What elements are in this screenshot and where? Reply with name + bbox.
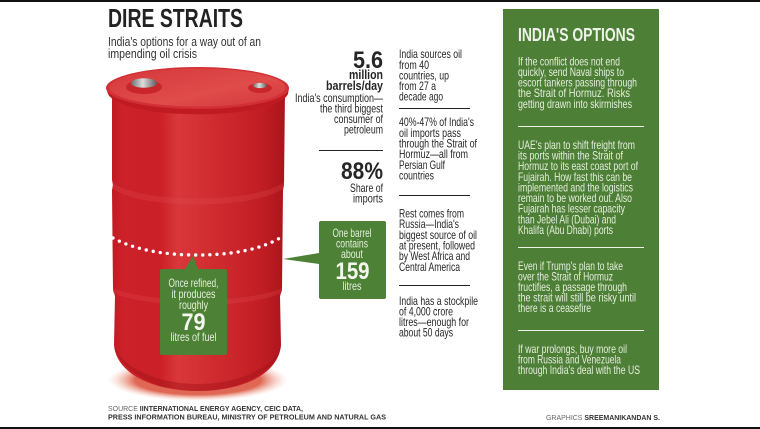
text block: stockpile: about 50 days [399, 326, 453, 340]
stat: 5.6 million barrels per day: million [349, 67, 383, 82]
callout: 79 litres of fuel: it produces [172, 288, 216, 301]
graphics credit: GRAPHICS SREEMANIKANDAN S. [546, 413, 660, 422]
option: UAE freight shift: implemented and the logistics [518, 182, 633, 194]
option: Trump's plan [518, 260, 636, 315]
text block: stockpile: litres—enough for [399, 316, 469, 329]
stat: 5.6 million barrels per day: consumer of [334, 113, 384, 126]
stat: 5.6 million barrels per day: India's consumption— [295, 92, 383, 105]
option: buy more oil [518, 343, 640, 377]
text block: oil sources: from 27 a [399, 80, 436, 93]
option: Trump's plan: Even if Trump's plan to take [518, 260, 623, 273]
option: naval escort: If the conflict does not end [518, 56, 620, 68]
stat: 88 percent share of imports: Share of [350, 182, 384, 195]
text block: stockpile: India has a stockpile [399, 295, 478, 308]
dotted fill line [113, 236, 283, 255]
text block: stockpile: of 4,000 crore [399, 306, 453, 318]
option: UAE freight shift: Fujairah. How fast this can be [518, 171, 632, 184]
text block: other sources [399, 208, 477, 274]
callout: 159 litres per barrel: One barrel [332, 227, 372, 240]
callout: 159 litres per barrel: litres [342, 280, 362, 293]
source credit [108, 404, 386, 422]
callout: 79 litres of fuel: roughly [179, 299, 208, 312]
text block: other sources: biggest source of oil [399, 229, 477, 242]
text block: Strait of Hormuz share: 40%-47% of India's [399, 116, 474, 129]
panel: India's options [503, 9, 659, 390]
option: buy more oil: from Russia and Venezuela [518, 354, 621, 366]
subtitle: India's options for a way out of an [108, 34, 261, 49]
callout: 159 litres per barrel: about [341, 248, 364, 261]
option: Trump's plan: the strait will still be risky until [518, 292, 636, 304]
illustration: red oil barrel [106, 67, 289, 401]
option: naval escort: quickly, send Naval ships to [518, 66, 624, 79]
callout: 79 litres of fuel: litres of fuel [170, 331, 216, 344]
text block: Strait of Hormuz share [399, 116, 478, 182]
option: Trump's plan: there is a ceasefire [518, 302, 591, 315]
callout: 159 litres per barrel: 159 [336, 258, 370, 285]
source credit: PRESS INFORMATION BUREAU, MINISTRY OF PETROLEUM AND NATURAL GAS [108, 412, 386, 422]
subtitle [108, 34, 261, 61]
stat: 88 percent share of imports: imports [353, 192, 383, 206]
text block: Strait of Hormuz share: Hormuz—all from [399, 148, 468, 161]
text block: other sources: Central America [399, 261, 460, 274]
option: buy more oil: through India's deal with the US [518, 364, 640, 377]
option: UAE freight shift: Fujairah has lesser capacity [518, 202, 625, 216]
source credit: SOURCE IINTERNATIONAL ENERGY AGENCY, CEIC DATA, [108, 404, 303, 413]
stat: 88 percent share of imports: 88% [341, 158, 383, 185]
callout: 159 litres per barrel [283, 221, 386, 299]
text block: oil sources: countries, up [399, 70, 449, 82]
option: naval escort: escort tankers passing through [518, 76, 637, 90]
stat: 5.6 million barrels per day: the third biggest [320, 102, 384, 116]
option: naval escort: the Strait of Hormuz. Risks [518, 87, 630, 100]
option: UAE freight shift: UAE's plan to shift freight from [518, 139, 635, 152]
text block: Strait of Hormuz share: countries [399, 170, 434, 182]
text block: oil sources: from 40 [399, 59, 429, 72]
text block: oil sources [399, 48, 462, 104]
stat: 5.6 million barrels per day: 5.6 [353, 47, 383, 74]
title: DIRE STRAITS [108, 5, 243, 33]
option: UAE freight shift [518, 139, 639, 237]
option: naval escort: getting drawn into skirmishes [518, 98, 632, 111]
option: Trump's plan: over the Strait of Hormuz [518, 270, 613, 284]
panel heading: INDIA'S OPTIONS [518, 24, 635, 45]
text block: other sources: at present, followed [399, 240, 475, 252]
text block: stockpile [399, 295, 478, 340]
text block: Strait of Hormuz share: oil imports pass [399, 127, 461, 140]
option: UAE freight shift: Hormuz to its east coast port of [518, 160, 639, 173]
text block: oil sources: India sources oil [399, 48, 462, 61]
option: naval escort [518, 56, 637, 111]
stat: 5.6 million barrels per day: petroleum [344, 124, 383, 136]
text block: other sources: Rest comes from [399, 208, 464, 220]
callout: 159 litres per barrel: contains [336, 238, 368, 250]
stat: 5.6 million barrels per day [295, 47, 384, 136]
callout: 79 litres of fuel: 79 [182, 309, 206, 336]
text block: oil sources: decade ago [399, 90, 443, 104]
option: UAE freight shift: Khalifa (Abu Dhabi) ports [518, 224, 613, 237]
text block: other sources: Russia—India's [399, 218, 459, 231]
text block: Strait of Hormuz share: Persian Gulf [399, 159, 446, 172]
option: UAE freight shift: than Jebel Ali (Dubai) and [518, 214, 616, 226]
stat: 5.6 million barrels per day: barrels/day [326, 78, 384, 93]
subtitle: impending oil crisis [108, 46, 197, 61]
callout: 79 litres of fuel [160, 256, 227, 355]
text block: other sources: by West Africa and [399, 250, 470, 263]
option: UAE freight shift: its ports within the Strait of [518, 150, 624, 162]
callout: 79 litres of fuel: Once refined, [168, 277, 218, 290]
text block: Strait of Hormuz share: through the Strait of [399, 138, 478, 150]
option: buy more oil: If war prolongs, buy more oil [518, 343, 627, 356]
stat: 88 percent share of imports [341, 158, 384, 206]
option: Trump's plan: fructifies, a passage through [518, 281, 627, 294]
option: UAE freight shift: remain to be worked out. Also [518, 192, 632, 205]
